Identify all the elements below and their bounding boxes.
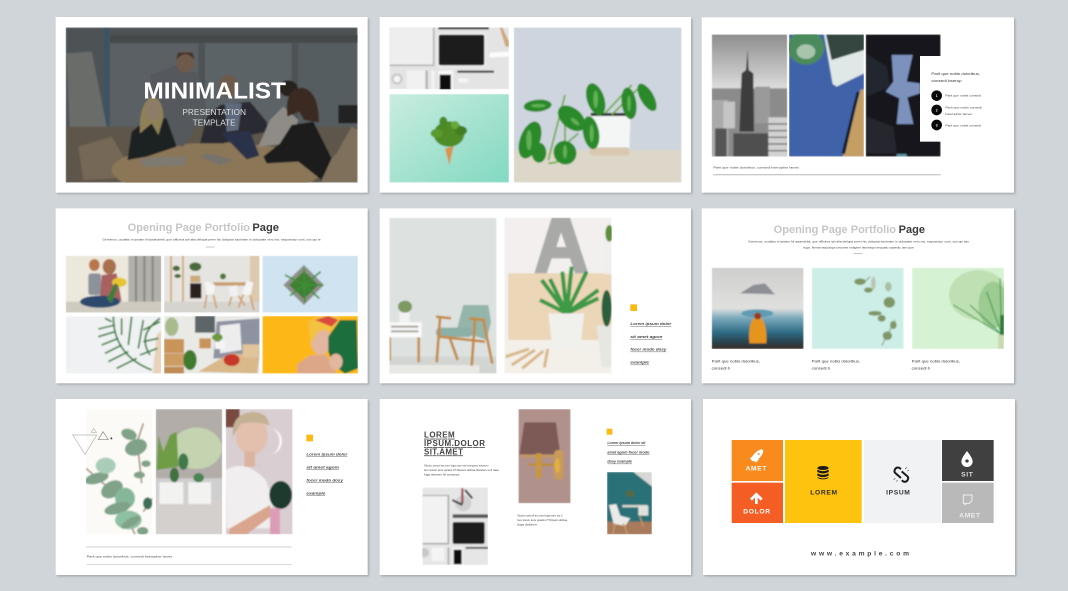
photo: monstera plant in white pot	[514, 28, 682, 182]
tile: amet (rocket): AMET	[746, 466, 767, 473]
decorative triangles	[73, 428, 112, 454]
heading: IPSUM.DOLOR	[424, 439, 485, 448]
heading: LOREM	[424, 431, 455, 440]
title: MINIMALIST: MINIMALIST	[143, 77, 286, 103]
tile: lorem (database): LOREM	[810, 490, 838, 497]
link list: focer modo dosy	[630, 347, 667, 352]
tile: dolor (arrow): DOLOR	[743, 508, 771, 515]
captions: Parit que nobis doloribus,	[912, 359, 960, 363]
photo: mother and child	[66, 256, 162, 312]
photo: palm leaf	[66, 316, 162, 374]
link list: focer modo dosy	[306, 477, 344, 482]
slide 3: three photos with numbered list	[702, 17, 1015, 194]
photo: moving boxes in living room	[164, 316, 260, 374]
slide 2: photo collage	[380, 17, 692, 194]
tile: ipsum (broken link)	[864, 440, 941, 523]
link list	[306, 451, 348, 495]
tile: ipsum (broken link): IPSUM	[886, 490, 911, 497]
icon: rocket	[750, 448, 765, 463]
link list: dosy example	[607, 459, 633, 464]
photo: black and white skyline	[712, 34, 788, 157]
subtitle: presentation template: TEMPLATE	[193, 118, 236, 128]
link list: Lorem ipsum dolor	[630, 321, 672, 326]
numbered list: 1	[936, 94, 938, 98]
link list: example	[630, 360, 650, 365]
tile: dolor (arrow)	[732, 483, 783, 523]
heading: Page	[899, 224, 925, 236]
numbered list: Parit que nobis consedi	[945, 124, 982, 127]
link list: sit amet agom	[306, 464, 340, 469]
icon: chat bubble	[963, 495, 972, 505]
tile: amet (chat)	[942, 483, 994, 523]
heading: Page	[252, 222, 279, 234]
numbered list heading	[931, 72, 980, 83]
lamp caption	[517, 514, 568, 527]
photo: desk flat lay	[422, 488, 488, 565]
captions	[712, 359, 960, 370]
intro text: Gernimus, oculabo in ipsiam hil ipsandebit, que officima iph alia deliqua prem hic doluptat asolmam in doluptate vero est, sequaectur sunt, sus qui lam	[748, 240, 970, 244]
numbered list	[931, 90, 983, 130]
captions: consedi b	[712, 366, 730, 370]
captions: consedi b	[812, 366, 830, 370]
intro text	[748, 240, 970, 249]
photo: blue desk with laptop and notebook	[789, 34, 864, 157]
heading: Opening Page Portfolio	[774, 224, 896, 236]
slide 1: cover	[56, 17, 369, 197]
heading: Opening Page Portfolio	[128, 222, 250, 234]
intro text: Gernimus, oculabo in ipsiam hil ipsandebit, que officima iph alia deliqua prem hic doluptat asolmam in doluptate vero est, sequaectur sunt, sus qui te	[102, 238, 321, 242]
link list	[630, 321, 672, 365]
photo: woman holding gloves	[226, 409, 293, 534]
tile: lorem (database)	[785, 440, 862, 523]
slide 8: text with lamp and desk photos	[380, 399, 692, 576]
tile: sit (drop)	[942, 440, 994, 481]
numbered list heading: consedi bserup	[931, 79, 962, 83]
slide 9: icon tile menu	[703, 399, 1016, 576]
link list: Lorem ipsum dolor sit	[607, 440, 646, 445]
photo: figure in orange coat facing misty lake	[712, 268, 804, 349]
lamp caption: fuga dolorem	[517, 524, 537, 527]
body text: fere ipsum ante quiatis ti? Dipsam dolriae blandem unti rawe	[424, 469, 500, 472]
photo: wall lamp on mauve wall	[518, 409, 571, 504]
photo: mint armchair and side table	[389, 218, 496, 374]
photo: woman with headscarf on yellow	[262, 316, 358, 374]
photo: letter A, plant pots, wooden crate	[504, 218, 612, 374]
photo: dark buildings against sky	[866, 34, 941, 157]
numbered list: Parit que nobis consedi	[945, 107, 983, 110]
tile: sit (drop): SIT	[961, 472, 974, 479]
lamp caption: Giuntu oximol as eum fuga nam ius ti	[517, 514, 563, 517]
photo: gypsophila on pale green	[912, 268, 1004, 349]
body text	[424, 464, 500, 477]
numbered list heading: Parit que nobis doloribus,	[931, 72, 980, 76]
subtitle: presentation template	[182, 107, 246, 128]
numbered list: 2	[936, 108, 938, 112]
numbered list: bserupbsr lamet	[945, 113, 972, 116]
body text: Giuntu oximol as eum fuga nam ius tuneporro volorum	[424, 464, 488, 467]
icon: database	[817, 466, 829, 479]
captions: Parit que nobis doloribus,	[812, 359, 860, 363]
photo: succulent on blue	[262, 256, 358, 312]
photo: eucalyptus branch	[86, 410, 153, 534]
white text panel	[920, 56, 943, 142]
tile: amet (chat): AMET	[959, 512, 981, 519]
accent square	[630, 304, 637, 311]
slide 7: plant photos with triangles and list	[56, 399, 369, 576]
numbered list: Parit que nobis consedi	[945, 95, 982, 98]
heading: SIT.AMET	[424, 447, 463, 456]
lamp caption: fere ipsum ante quiatis ti? Dipsam dolriae	[517, 519, 568, 522]
captions: consedi b	[912, 366, 930, 370]
slide 5: chair and plant photos with list	[380, 208, 692, 385]
icon: broken link	[894, 468, 908, 482]
photo: white dining room	[164, 256, 260, 312]
website url: www.example.com	[810, 551, 909, 558]
photo: cactus pots on window sill	[156, 409, 222, 534]
photo: teal dining room	[607, 472, 652, 534]
body text: fuga dolorem hil consequi	[424, 474, 460, 477]
link list: sit amet agom	[630, 334, 663, 339]
intro text: fuga. Nerita tequatqui ortiones indigent lameaqui sequatu capedic tam que	[803, 245, 915, 249]
photo: green plant in a cone	[389, 94, 509, 183]
slide 4: portfolio grid	[56, 208, 369, 385]
link list: amet agom focer modo	[607, 449, 650, 454]
icon: water drop	[961, 451, 973, 467]
icon: up arrow	[750, 492, 763, 504]
slide 6: three photos with captions	[702, 208, 1015, 385]
tile: amet (rocket)	[732, 440, 783, 481]
subtitle: presentation template: PRESENTATION	[182, 107, 246, 117]
caption: Parit que nobis doloribus, consedi bserupbsr lamet	[713, 165, 799, 169]
photo: desk stationery flat lay	[389, 27, 509, 90]
numbered list: 3	[936, 123, 938, 127]
captions: Parit que nobis doloribus,	[712, 359, 760, 363]
heading	[424, 431, 485, 456]
accent square	[306, 435, 313, 441]
photo: eucalyptus sprigs on mint	[812, 268, 904, 349]
link list: example	[306, 490, 326, 495]
caption: Parit que nobis doloribus, consedi bserupbsr lamet	[87, 554, 172, 558]
link list: Lorem ipsum dolor	[306, 451, 348, 456]
cover photo: meeting	[66, 27, 358, 183]
accent square	[607, 429, 612, 435]
link list	[607, 440, 650, 464]
